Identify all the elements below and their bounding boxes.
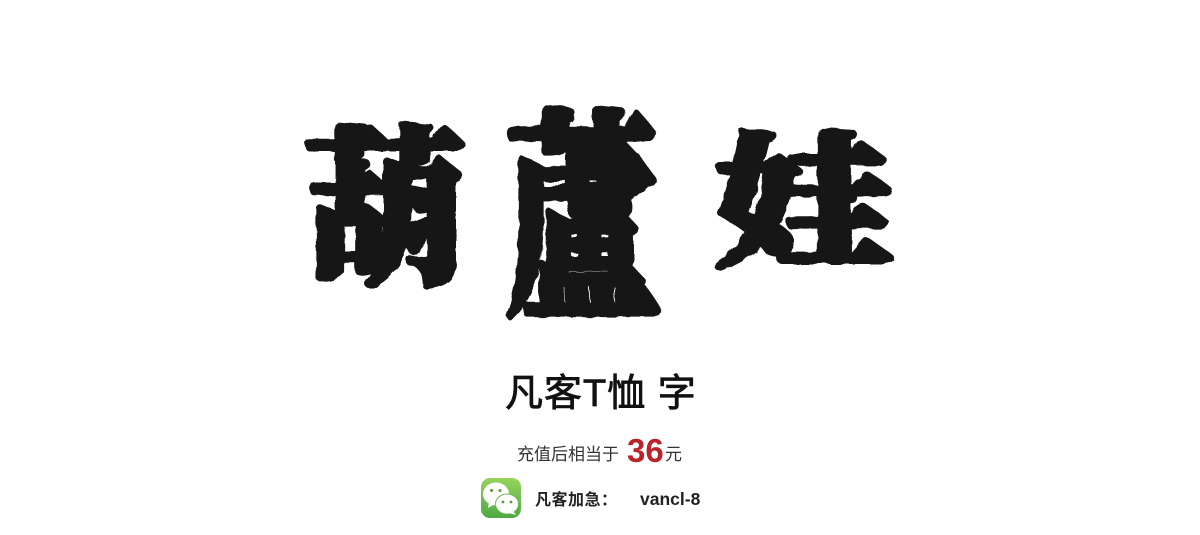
icon: WeChat: [481, 478, 521, 518]
price line: [517, 432, 682, 469]
character: 葫: 葫: [304, 77, 465, 318]
product name heading: 凡客T恤 字: [505, 373, 697, 415]
price line: 充值后相当于: [517, 445, 619, 464]
character: 娃: 娃: [716, 89, 891, 296]
calligraphy title: [304, 44, 894, 340]
price number: 36: [627, 432, 664, 469]
price line: 元: [665, 445, 682, 464]
WeChat ID: vancl-8: [640, 489, 700, 509]
WeChat label: 凡客加急：: [535, 492, 618, 509]
